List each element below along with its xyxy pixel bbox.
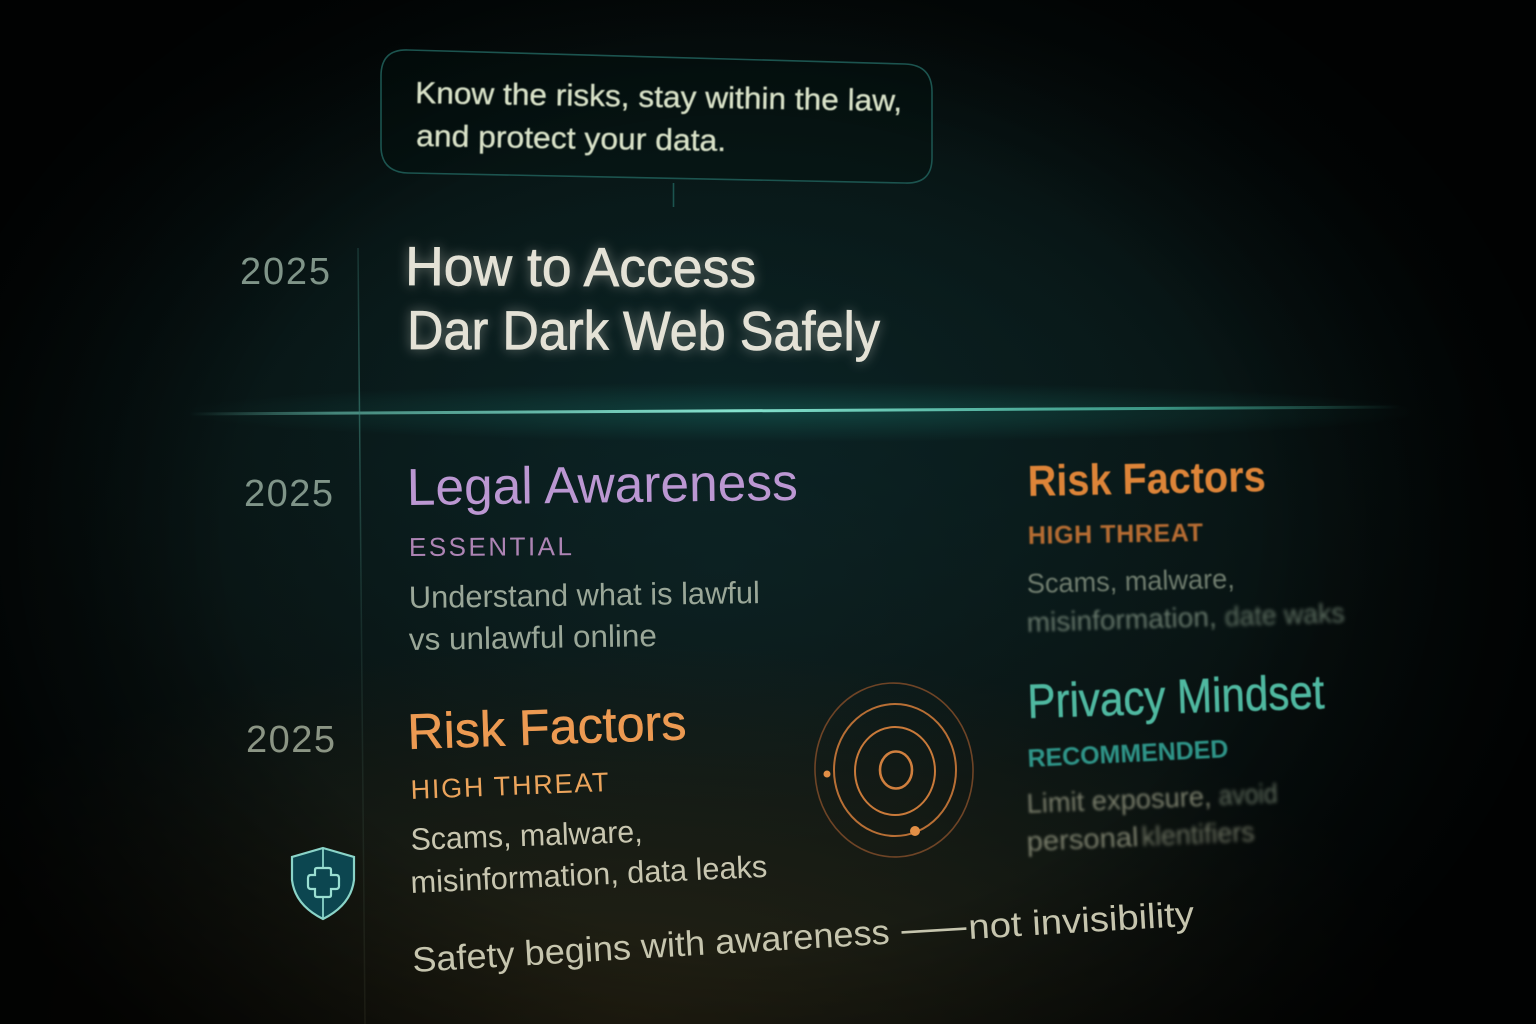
side panel: risk factors: HIGH THREAT xyxy=(1028,519,1203,550)
callout: quote box xyxy=(381,50,932,207)
section: risk factors: Risk Factors xyxy=(406,694,687,760)
side panel: privacy mindset: RECOMMENDED xyxy=(1027,735,1229,773)
section: risk factors xyxy=(406,694,768,900)
side panel: privacy mindset: Privacy Mindset xyxy=(1027,666,1325,729)
side panel: privacy mindset: avoid xyxy=(1218,778,1278,811)
year label: title row: 2025 xyxy=(240,251,330,293)
section: legal awareness: ESSENTIAL xyxy=(409,531,572,562)
section: risk factors: misinformation, data leaks xyxy=(410,849,768,900)
section: risk factors: HIGH THREAT xyxy=(410,767,609,805)
section: legal awareness: vs unlawful online xyxy=(409,618,657,657)
side panel: risk factors: date waks xyxy=(1224,597,1345,632)
section: legal awareness: Legal Awareness xyxy=(406,454,798,517)
year label: legal awareness: 2025 xyxy=(244,473,333,515)
side panel: privacy mindset: Limit exposure, xyxy=(1026,781,1212,819)
title: How to Access xyxy=(405,235,756,299)
year label: risk factors: 2025 xyxy=(246,719,335,761)
callout: quote box: Know the risks, stay within the law, xyxy=(415,75,902,118)
side panel: risk factors: misinformation, xyxy=(1026,601,1217,638)
side panel: privacy mindset: klentifiers xyxy=(1141,816,1255,852)
icon: shield xyxy=(292,848,354,919)
icon: orbit target xyxy=(811,679,977,861)
closing statement xyxy=(411,895,1196,980)
side panel: risk factors: Scams, malware, xyxy=(1026,563,1235,599)
section: legal awareness xyxy=(406,454,798,657)
vertical timeline line xyxy=(358,248,365,1024)
closing statement: not invisibility xyxy=(967,895,1196,947)
title: Dar Dark Web Safely xyxy=(407,299,881,362)
side panel: privacy mindset xyxy=(1026,666,1325,857)
side panel: risk factors xyxy=(1026,452,1345,638)
section: risk factors: Scams, malware, xyxy=(410,814,643,857)
horizontal glow divider xyxy=(180,382,1420,442)
callout: quote box: and protect your data. xyxy=(416,118,726,158)
title xyxy=(405,235,881,362)
closing statement: Safety begins with awareness xyxy=(411,913,891,980)
section: legal awareness: Understand what is lawful xyxy=(409,575,760,615)
side panel: privacy mindset: personal xyxy=(1026,821,1139,857)
side panel: risk factors: Risk Factors xyxy=(1027,452,1266,506)
